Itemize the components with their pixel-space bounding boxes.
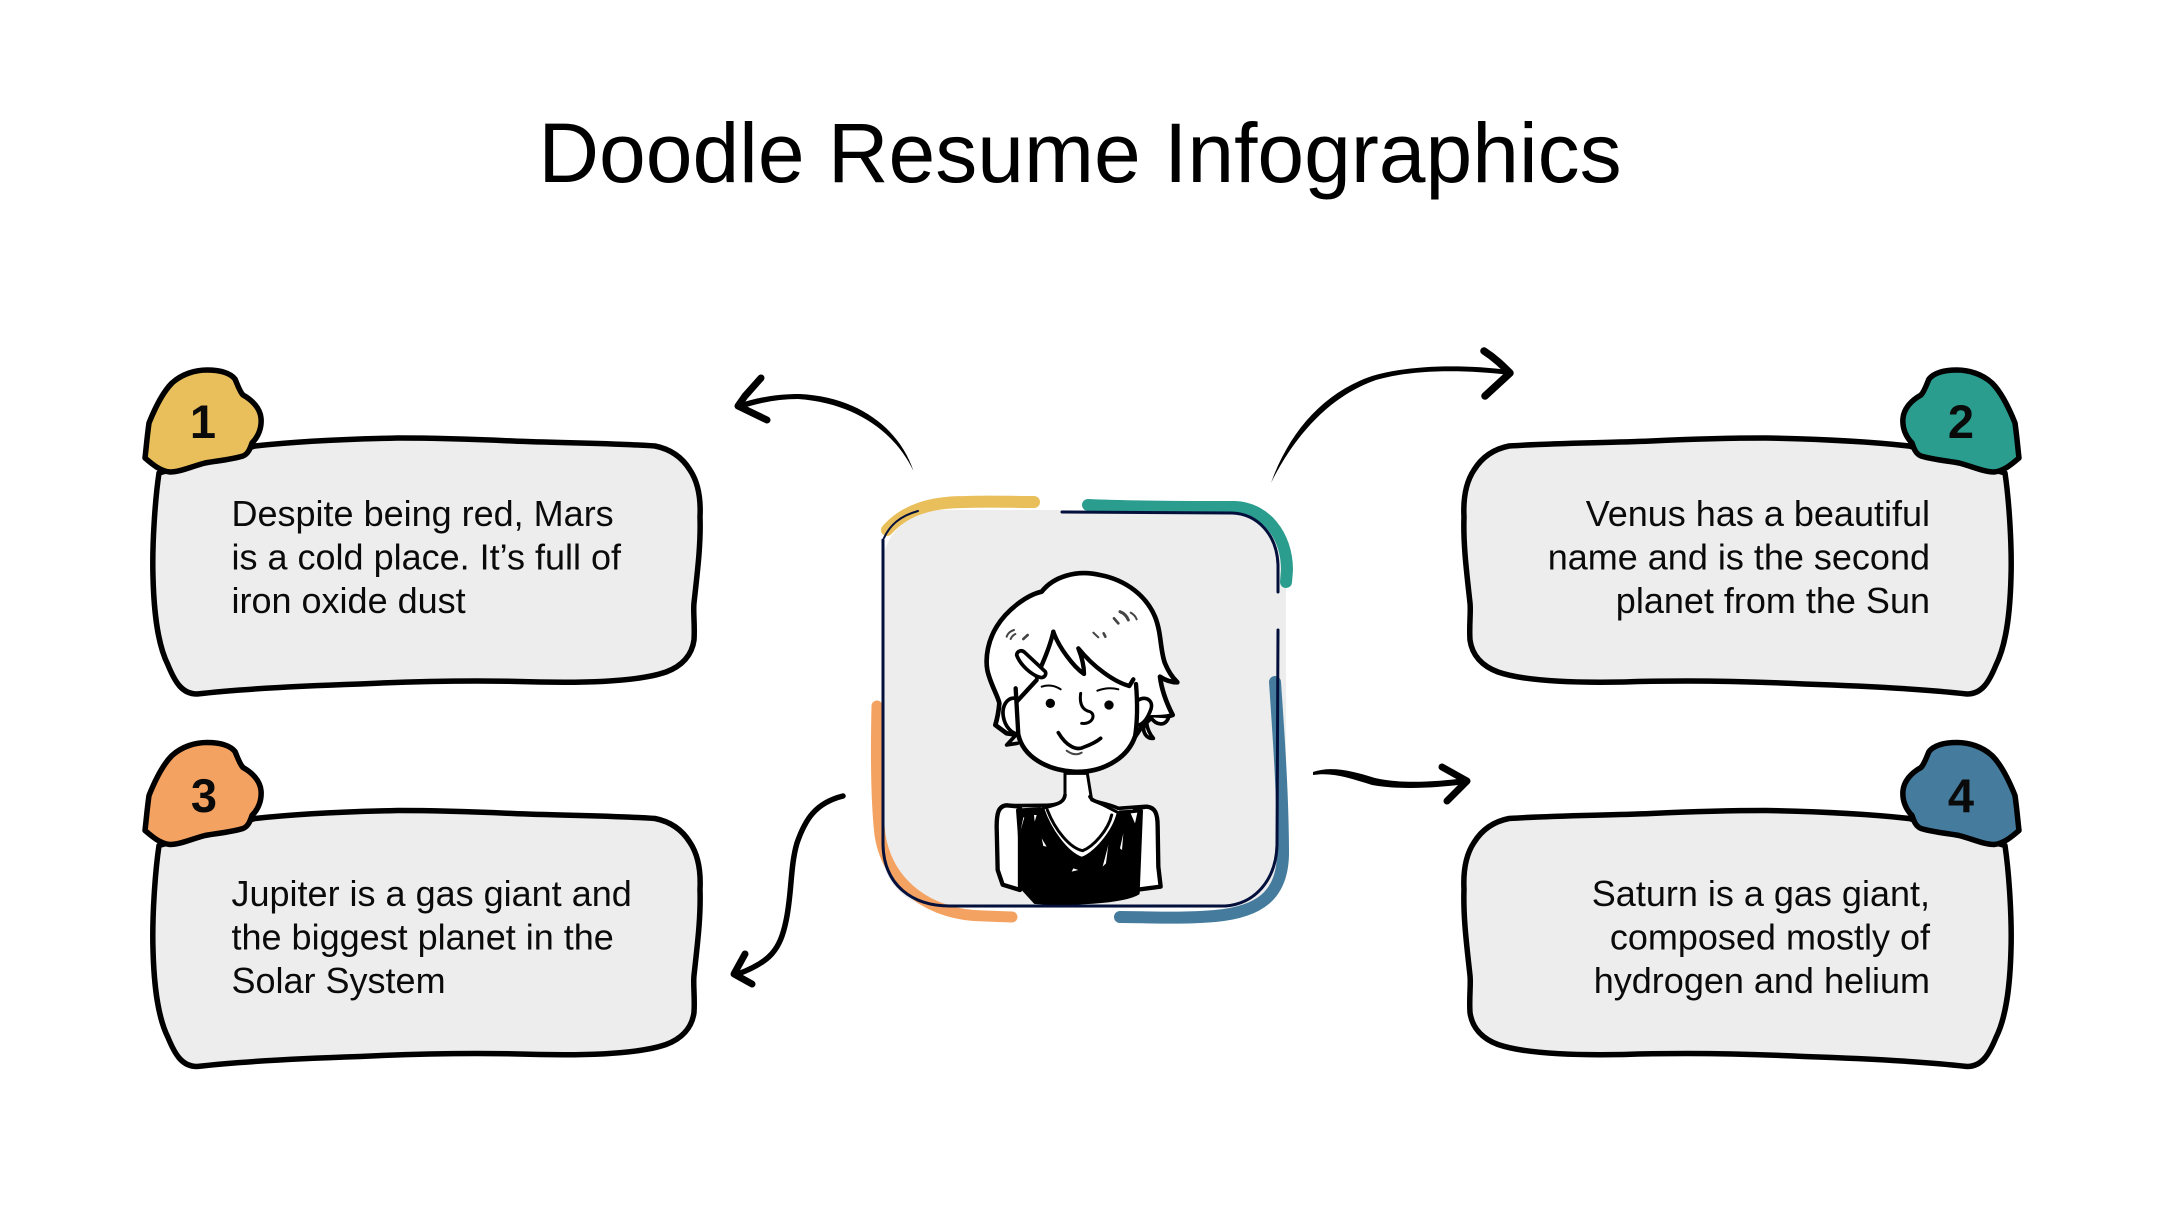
arrow: to card 1 — [738, 378, 914, 471]
card 1 text: Despite being red, Mars — [232, 493, 614, 534]
portrait: ears and curls — [1003, 698, 1168, 745]
arrow: to card 2 — [1271, 351, 1510, 483]
card 3 text: Jupiter is a gas giant and — [232, 873, 632, 914]
portrait: collar and neck — [1043, 773, 1118, 858]
title: Doodle Resume Infographics — [538, 106, 1622, 200]
card 4 number badge: 4 — [1948, 769, 1974, 822]
card 3 text: Solar System — [232, 960, 446, 1001]
card 3 number badge — [145, 742, 261, 844]
portrait: arms — [997, 805, 1161, 890]
frame accent: teal — [1088, 505, 1287, 582]
portrait: shirt — [1017, 808, 1142, 904]
portrait: head and hair — [987, 573, 1177, 772]
portrait doodle — [987, 573, 1177, 904]
portrait: hair clip — [1017, 651, 1046, 678]
panel: card 3 — [145, 742, 700, 1066]
card 4 text: Saturn is a gas giant, — [1592, 873, 1930, 914]
card 2 number badge — [1903, 370, 2019, 472]
card 2 box — [1464, 438, 2011, 694]
card 2 text: name and is the second — [1548, 536, 1930, 578]
panel: card 1 — [145, 370, 700, 694]
card 1 box — [153, 438, 700, 694]
card 3 number badge: 3 — [191, 769, 217, 822]
card 2 number badge: 2 — [1948, 395, 1974, 448]
frame accent: orange — [876, 706, 1012, 917]
card 1 number badge — [145, 370, 261, 472]
card 1 text: is a cold place. It’s full of — [232, 536, 622, 578]
card 3 box — [153, 810, 700, 1066]
frame accent: blue — [1120, 682, 1283, 918]
frame navy outline — [883, 511, 1278, 906]
frame accent: yellow — [887, 502, 1034, 530]
portrait: shirt scribble gaps — [1021, 813, 1137, 872]
frame gray background — [882, 510, 1286, 908]
arrow: to card 4 — [1313, 767, 1467, 801]
card 4 box — [1464, 810, 2011, 1066]
card 3 text: the biggest planet in the — [232, 916, 614, 958]
central portrait frame — [876, 502, 1287, 918]
panel: card 2 — [1464, 370, 2019, 694]
card 4 text: composed mostly of — [1610, 916, 1931, 958]
card 4 text: hydrogen and helium — [1594, 960, 1930, 1001]
arrow: to card 3 — [734, 796, 843, 984]
portrait: gray hair and lip marks — [1007, 612, 1137, 754]
portrait: eyebrows nose smile — [1042, 685, 1118, 748]
portrait: eyes — [1046, 699, 1114, 710]
card 4 number badge — [1903, 742, 2019, 844]
card 1 text: iron oxide dust — [232, 580, 466, 621]
card 2 text: planet from the Sun — [1616, 580, 1930, 621]
card 1 number badge: 1 — [190, 395, 216, 448]
panel: card 4 — [1464, 742, 2019, 1066]
portrait: face outline and bangs — [1016, 632, 1137, 737]
card 2 text: Venus has a beautiful — [1586, 493, 1930, 534]
